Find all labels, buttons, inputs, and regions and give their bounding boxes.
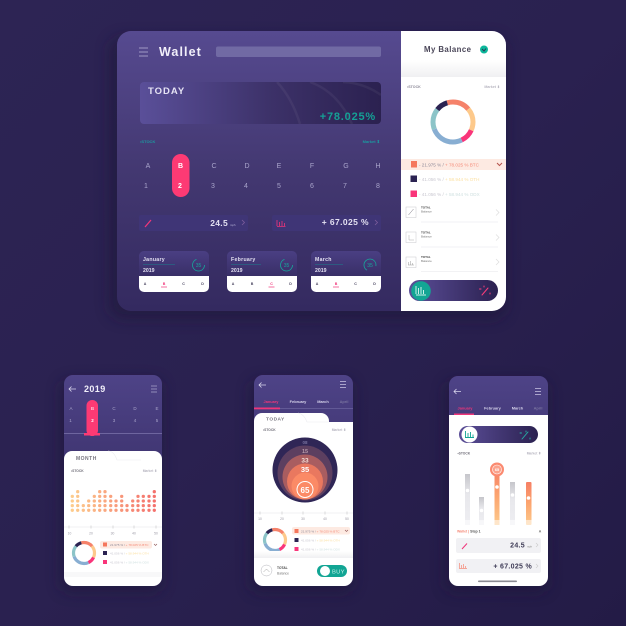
legend: BTC: - 21.975 % / + 78.025 % BTC bbox=[419, 162, 480, 168]
month tabs: February bbox=[484, 406, 502, 410]
month tabs: April bbox=[534, 406, 542, 410]
calendar letters and numbers: G bbox=[343, 163, 349, 170]
calendar letters: E bbox=[155, 406, 159, 411]
card: January: 2019 bbox=[143, 268, 155, 274]
calendar letters and numbers: D bbox=[244, 163, 250, 170]
list row 3: TOTAL bbox=[421, 255, 431, 259]
text: total balance bbox=[277, 566, 289, 576]
heading: my balance: My Balance bbox=[424, 45, 472, 54]
calendar letters and numbers: F bbox=[310, 163, 314, 170]
bar chart: 65 bbox=[495, 468, 499, 472]
phone 1: month view bbox=[60, 375, 162, 592]
radial chart: 35 bbox=[301, 465, 309, 474]
icon: check bbox=[480, 46, 488, 54]
calendar letters and numbers: 4 bbox=[244, 183, 248, 190]
chart axis bbox=[254, 512, 353, 521]
legend bbox=[100, 541, 157, 564]
card: March: D bbox=[373, 282, 376, 286]
calendar letters and numbers: A bbox=[146, 163, 151, 170]
card: February bbox=[227, 251, 297, 292]
chart axis: 20 bbox=[280, 517, 284, 521]
stat: speed bbox=[456, 538, 541, 553]
chart axis bbox=[64, 526, 162, 536]
bar chart bbox=[465, 462, 532, 525]
step label: Wallet | Step 1 bbox=[457, 530, 481, 534]
panel: my balance bbox=[401, 31, 506, 311]
calendar letters and numbers: E bbox=[277, 163, 282, 170]
calendar letters and numbers: 6 bbox=[310, 183, 314, 190]
legend: 21.975 % / + 78.025 % BTC bbox=[110, 543, 149, 547]
stat: percentage: + 67.025 % bbox=[322, 217, 369, 227]
calendar letters: 1 bbox=[69, 418, 72, 423]
month tabs: April bbox=[340, 399, 348, 404]
stock label row bbox=[263, 428, 346, 432]
calendar letters: D bbox=[133, 406, 137, 411]
card: February: A bbox=[232, 282, 235, 286]
icon: total balance bbox=[261, 565, 272, 576]
text: total balance: Balance bbox=[277, 572, 289, 576]
card: February: 2019 bbox=[231, 268, 243, 274]
list row 3 bbox=[406, 255, 499, 272]
selected pill bbox=[86, 400, 98, 436]
tab label: today: TODAY bbox=[266, 416, 285, 422]
card: January: 35 bbox=[196, 263, 201, 269]
stat: speed: 24.5 bbox=[510, 542, 525, 550]
legend: 41.056 % / + 58.944 % ODX bbox=[110, 560, 149, 564]
tab label: month: MONTH bbox=[76, 456, 97, 462]
calendar letters: 4 bbox=[134, 418, 137, 423]
card: March: C bbox=[354, 282, 357, 286]
step label: A bbox=[539, 530, 542, 534]
step label bbox=[457, 530, 542, 534]
card: January: B bbox=[163, 282, 166, 286]
stock label row bbox=[407, 84, 500, 89]
stat: percentage bbox=[272, 215, 381, 231]
month tabs: March bbox=[512, 406, 524, 410]
chart axis: 20 bbox=[89, 532, 93, 536]
donut chart bbox=[433, 102, 473, 142]
stat: speed: 24.5 bbox=[210, 218, 228, 228]
card: March: March bbox=[315, 257, 332, 263]
chart axis: 30 bbox=[301, 517, 305, 521]
stock label row: •STOCK bbox=[263, 428, 276, 432]
calendar letters: 2 bbox=[91, 418, 94, 423]
legend: 41.056 % / + 58.944 % ODX bbox=[301, 548, 340, 552]
card: January: C bbox=[182, 282, 185, 286]
fade band bbox=[449, 520, 548, 526]
title: Wallet: Wallet bbox=[159, 45, 202, 59]
chart axis: 40 bbox=[323, 517, 327, 521]
stock label row: Market ⬍ bbox=[484, 84, 500, 89]
donut chart bbox=[74, 542, 94, 564]
chart axis: 50 bbox=[154, 532, 158, 536]
legend: 41.056 % / + 58.944 % OTH bbox=[110, 552, 149, 556]
calendar letters and numbers: 2 bbox=[178, 183, 182, 190]
card: today: +78.025% bbox=[320, 111, 376, 123]
card: March: A bbox=[316, 282, 319, 286]
calendar letters and numbers bbox=[144, 163, 381, 190]
stock label row: Market ⬍ bbox=[363, 139, 380, 144]
stat: speed bbox=[139, 215, 248, 231]
calendar letters and numbers: 8 bbox=[376, 183, 380, 190]
toggle: bottom bbox=[409, 280, 498, 301]
month tabs: March bbox=[317, 399, 329, 404]
stat: percentage bbox=[456, 559, 541, 573]
stock label row bbox=[140, 139, 380, 144]
search bar bbox=[216, 46, 381, 57]
card: March: 35 bbox=[367, 263, 373, 269]
month tabs: January bbox=[264, 399, 279, 404]
stat: speed: mph bbox=[230, 223, 236, 227]
card: March bbox=[311, 251, 381, 292]
stock label row: Market ⬍ bbox=[143, 469, 157, 473]
card: February: 35 bbox=[284, 263, 289, 269]
legend bbox=[292, 527, 350, 552]
stock label row bbox=[458, 452, 541, 456]
chart axis: 30 bbox=[111, 532, 114, 536]
calendar letters and numbers: 1 bbox=[144, 183, 148, 190]
list row 3: Balance bbox=[421, 259, 432, 263]
calendar letters: B bbox=[91, 406, 94, 411]
calendar letters: A bbox=[69, 406, 73, 411]
legend: ODX bbox=[410, 190, 480, 197]
card: January bbox=[139, 251, 209, 292]
text: total balance: TOTAL bbox=[277, 566, 288, 570]
legend: 21.975 % / + 78.025 % BTC bbox=[301, 530, 340, 534]
card: January: January bbox=[143, 257, 165, 263]
stock label row: Market ⬍ bbox=[527, 452, 541, 456]
calendar letters and numbers: 7 bbox=[343, 183, 347, 190]
radial chart: 65 bbox=[301, 486, 310, 495]
list row 2 bbox=[406, 230, 499, 247]
legend: BTC bbox=[401, 159, 506, 170]
legend: ODX: - 41.056 % / + 58.944 % ODX bbox=[419, 192, 480, 197]
icon: menu bbox=[139, 48, 148, 56]
panel: desktop wallet dashboard bbox=[109, 31, 506, 319]
card: February: February bbox=[231, 257, 256, 263]
heading: 2019: 2019 bbox=[84, 384, 106, 394]
legend: OTH: - 41.056 % / + 58.944 % OTH bbox=[419, 177, 479, 182]
legend: OTH bbox=[410, 176, 479, 182]
icon: back arrow bbox=[69, 386, 76, 392]
card: March: 2019 bbox=[315, 268, 327, 274]
list row 1 bbox=[406, 206, 499, 222]
tab underline bbox=[254, 408, 353, 409]
calendar letters: 3 bbox=[113, 418, 116, 423]
list row 2: Balance bbox=[421, 234, 432, 238]
stat: speed: mph bbox=[527, 544, 533, 548]
card: February: C bbox=[270, 282, 273, 286]
phone 3: bar view bbox=[445, 376, 548, 592]
stat: percentage: + 67.025 % bbox=[493, 564, 532, 570]
chart axis: 40 bbox=[132, 532, 136, 536]
card: February: B bbox=[251, 282, 254, 286]
white sheet bbox=[449, 415, 548, 586]
radial chart: 33 bbox=[301, 458, 309, 464]
legend: 41.056 % / + 58.944 % OTH bbox=[301, 538, 340, 542]
icon: menu bbox=[151, 386, 157, 392]
card: January: A bbox=[144, 282, 147, 286]
calendar letters and numbers: 5 bbox=[277, 183, 281, 190]
card: today: TODAY bbox=[148, 86, 185, 97]
calendar letters and numbers: H bbox=[375, 163, 381, 170]
radial chart: 15 bbox=[302, 449, 308, 455]
toggle: chart bbox=[459, 426, 538, 443]
month tabs bbox=[458, 406, 542, 410]
radial chart: 08 bbox=[302, 440, 308, 445]
dot chart bbox=[72, 492, 154, 510]
chart axis: 50 bbox=[345, 517, 349, 521]
calendar selected pill bbox=[172, 154, 190, 197]
home indicator bbox=[478, 580, 517, 582]
card: March: B bbox=[335, 282, 338, 286]
stock label row bbox=[71, 469, 157, 473]
donut chart bbox=[264, 530, 286, 550]
white sheet bbox=[64, 451, 162, 586]
phone 2: today view bbox=[250, 375, 353, 592]
month tabs: February bbox=[290, 399, 307, 404]
stock label row: •STOCK bbox=[458, 452, 471, 456]
icon: menu bbox=[535, 388, 541, 394]
stock label row: •STOCK bbox=[407, 85, 421, 89]
icon: back arrow bbox=[259, 382, 266, 388]
month tabs bbox=[264, 399, 348, 404]
radial chart bbox=[272, 438, 338, 502]
card: today bbox=[140, 82, 381, 124]
bottom band bbox=[254, 551, 353, 558]
list row 1: TOTAL bbox=[421, 206, 431, 210]
calendar letters bbox=[69, 406, 159, 423]
tab underline bbox=[454, 414, 474, 415]
calendar letters: C bbox=[112, 406, 116, 411]
divider with marker bbox=[64, 433, 162, 436]
calendar letters: 5 bbox=[156, 418, 159, 423]
card: February: D bbox=[289, 282, 292, 286]
list row 2: TOTAL bbox=[421, 230, 431, 234]
white sheet bbox=[254, 413, 353, 586]
toggle: buy: BUY bbox=[332, 570, 345, 576]
chart axis: 10 bbox=[258, 517, 262, 521]
chart axis: 10 bbox=[68, 532, 71, 536]
calendar letters and numbers: 3 bbox=[211, 183, 215, 190]
card: January: D bbox=[201, 282, 204, 286]
stock label row: •STOCK bbox=[71, 469, 84, 473]
icon: back arrow bbox=[454, 389, 461, 394]
stock label row: Market ⬍ bbox=[332, 428, 346, 432]
list row 1: Balance bbox=[421, 210, 432, 214]
month tabs: January bbox=[458, 406, 473, 410]
stock label row: •STOCK bbox=[140, 139, 155, 144]
calendar letters and numbers: B bbox=[178, 163, 183, 170]
icon: menu bbox=[340, 382, 346, 388]
toggle: buy bbox=[317, 565, 347, 577]
calendar letters and numbers: C bbox=[211, 163, 217, 170]
